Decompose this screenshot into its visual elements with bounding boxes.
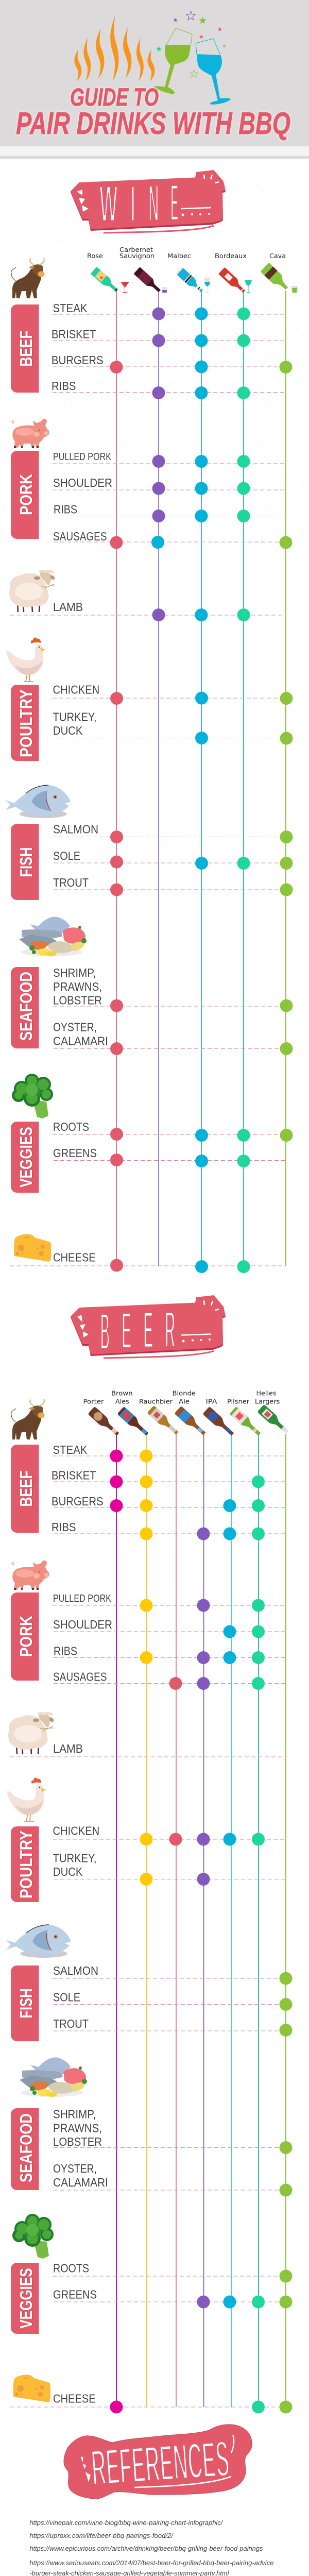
heading banner: beer: R xyxy=(165,1300,175,1360)
reference links xyxy=(29,2519,276,2576)
beer column headers: Blonde xyxy=(172,1390,196,1397)
panel tab: poultry (beer) xyxy=(11,1826,39,1902)
panel tab: pork (beer): PORK xyxy=(16,1616,36,1657)
reference links: https://vinepair.com/wine-blog/bbq-wine-pairing-chart-infographic/ xyxy=(29,2519,224,2527)
panel tab: seafood (beer): SEAFOOD xyxy=(16,2113,36,2182)
icon: brown ale bottle xyxy=(117,1406,151,1438)
row: brisket: BRISKET xyxy=(52,328,96,341)
wine column headers: Cava xyxy=(269,252,286,260)
row: roots xyxy=(53,1120,293,1142)
icon: rising flames xyxy=(74,15,154,81)
beer row: shoulder xyxy=(53,1618,286,1638)
beer row: pulled pork xyxy=(53,1593,286,1612)
icon: chicken xyxy=(6,637,45,682)
panel tab: fish (beer) xyxy=(11,1965,39,2041)
icon: sheep (beer) xyxy=(8,1714,55,1754)
beer row: shrimp, prawns, lobster: SHRIMP, xyxy=(53,2107,96,2121)
row: sole xyxy=(53,849,293,870)
row: lamb: LAMB xyxy=(53,600,83,614)
icon: chicken (beer) xyxy=(7,1777,46,1822)
icon: broccoli xyxy=(12,1074,53,1118)
icon: cheese xyxy=(14,1234,52,1262)
row: turkey, duck: DUCK xyxy=(53,724,83,737)
wine column headers: Rose xyxy=(87,252,103,260)
icon: fish xyxy=(5,785,71,818)
panel tab: poultry xyxy=(11,685,39,761)
icon: bull (beer) xyxy=(11,1399,44,1439)
heading banner: references xyxy=(64,2425,252,2499)
icon: helles lager bottle xyxy=(257,1404,291,1436)
row: salmon: SALMON xyxy=(53,822,98,836)
wine column headers xyxy=(87,246,286,260)
beer row: shrimp, prawns, lobster: LOBSTER xyxy=(53,2135,102,2148)
row: pork ribs xyxy=(54,503,286,522)
beer row: chicken: CHICKEN xyxy=(53,1824,99,1837)
heading banner: references: REFERENCES xyxy=(90,2430,231,2497)
icon: fish (beer) xyxy=(6,1925,71,1958)
icon: broccoli (beer) xyxy=(12,2214,54,2259)
row: chicken: CHICKEN xyxy=(53,683,99,697)
row: sausages: SAUSAGES xyxy=(53,530,107,543)
beer row: greens: GREENS xyxy=(53,2287,97,2301)
beer row: shoulder: SHOULDER xyxy=(53,1618,112,1631)
panel tab: pork xyxy=(11,451,39,539)
beer column headers: IPA xyxy=(206,1398,217,1405)
beer row: oyster, calamari: OYSTER, xyxy=(53,2162,97,2175)
beer row: turkey, duck: DUCK xyxy=(53,1865,83,1878)
wine column lines xyxy=(116,291,286,1266)
wine column headers: Carbernet xyxy=(119,246,153,253)
beer column headers: Ale xyxy=(179,1398,190,1405)
beer row: ribs: RIBS xyxy=(52,1520,76,1534)
icon: rauchbier bottle xyxy=(147,1405,181,1437)
panel tab: pork: PORK xyxy=(16,474,36,515)
beer row: trout xyxy=(53,2017,293,2037)
reference links: https://uproxx.com/life/beer-bbq-pairings-food/2/ xyxy=(29,2532,174,2539)
row: oyster, calamari: OYSTER, xyxy=(53,1020,97,1033)
beer row: greens xyxy=(53,2287,293,2308)
beer row: oyster, calamari xyxy=(53,2162,293,2197)
icon: rose bottle and glass xyxy=(91,267,129,294)
panel tab: veggies (beer): VEGGIES xyxy=(16,2268,36,2329)
row: turkey, duck xyxy=(53,710,293,745)
beer row: brisket xyxy=(52,1468,286,1488)
beer row: sole xyxy=(53,1991,293,2011)
beer row: sole: SOLE xyxy=(53,1991,80,2004)
row: ribs: RIBS xyxy=(52,379,76,393)
row: roots: ROOTS xyxy=(53,1120,89,1133)
beer row: cheese xyxy=(10,2392,293,2413)
beer row: sausages xyxy=(53,1670,286,1690)
row: oyster, calamari: CALAMARI xyxy=(53,1035,108,1048)
panel tab: veggies xyxy=(11,1122,39,1193)
heading banner: wine: N xyxy=(148,174,159,233)
row: cheese xyxy=(10,1251,286,1273)
panel tab: fish: FISH xyxy=(16,847,36,877)
beer column headers: Brown xyxy=(111,1390,133,1397)
row: shoulder xyxy=(53,476,286,495)
icon: pilsner bottle xyxy=(229,1406,263,1438)
row: shoulder: SHOULDER xyxy=(53,476,112,489)
panel tab: poultry (beer): POULTRY xyxy=(16,1831,36,1899)
beer row: turkey, duck: TURKEY, xyxy=(53,1852,97,1865)
row: chicken xyxy=(53,683,293,705)
row: oyster, calamari xyxy=(53,1020,293,1055)
icon: pig xyxy=(12,419,49,448)
panel tab: fish (beer): FISH xyxy=(16,1989,36,2019)
row: burgers xyxy=(52,353,293,374)
row: pulled pork xyxy=(53,451,286,468)
row: trout xyxy=(53,876,293,896)
row: sole: SOLE xyxy=(53,849,80,862)
speckled paper background xyxy=(0,159,309,555)
beer row: oyster, calamari: CALAMARI xyxy=(53,2176,108,2189)
row: cheese: CHEESE xyxy=(53,1251,96,1264)
row: steak: STEAK xyxy=(53,301,88,315)
icon: seafood platter (beer) xyxy=(20,2057,87,2097)
panel tab: fish xyxy=(11,824,39,900)
beer row: ribs xyxy=(52,1520,286,1540)
beer row: cheese: CHEESE xyxy=(53,2392,96,2405)
header strip xyxy=(0,146,309,159)
heading banner: beer xyxy=(71,1295,226,1362)
icon: pig (beer) xyxy=(12,1561,49,1590)
icon: blonde ale bottle xyxy=(174,1406,208,1437)
beer column lines xyxy=(116,1434,286,2407)
beer row: trout: TROUT xyxy=(53,2017,89,2030)
row: shrimp, prawns, lobster: PRAWNS, xyxy=(53,980,102,993)
panel tab: seafood: SEAFOOD xyxy=(16,972,36,1041)
panel tab: seafood xyxy=(11,967,39,1048)
icon: seafood platter xyxy=(19,917,87,956)
row: pulled pork: PULLED PORK xyxy=(53,451,112,463)
row: trout: TROUT xyxy=(53,876,89,889)
panel tab: seafood (beer) xyxy=(11,2108,39,2190)
heading banner: beer: E xyxy=(143,1300,153,1360)
row: sausages xyxy=(53,530,293,549)
row: ribs xyxy=(52,379,286,399)
heading banner: wine xyxy=(71,170,226,234)
row: salmon xyxy=(53,822,293,843)
beer row: roots: ROOTS xyxy=(53,2262,89,2275)
row: turkey, duck: TURKEY, xyxy=(53,710,97,723)
heading banner: beer: E xyxy=(122,1301,131,1361)
icon: malbec bottle and glass xyxy=(176,267,210,295)
beer row: steak: STEAK xyxy=(53,1443,88,1456)
icon: green wine glass xyxy=(153,28,192,94)
beer column headers xyxy=(83,1390,280,1405)
beer row: steak xyxy=(53,1443,286,1462)
beer row: burgers xyxy=(52,1495,286,1512)
beer row: burgers: BURGERS xyxy=(52,1495,104,1508)
beer row: salmon xyxy=(53,1964,293,1985)
icon: cava bottle and glass xyxy=(261,263,298,293)
row: lamb xyxy=(10,600,286,621)
panel tab: veggies: VEGGIES xyxy=(16,1127,36,1188)
icon: celebration stars xyxy=(156,11,226,77)
row: brisket xyxy=(52,328,286,347)
beer row: pulled pork: PULLED PORK xyxy=(53,1593,112,1604)
icon: bordeaux bottle and glass xyxy=(218,267,252,295)
beer row: pork ribs: RIBS xyxy=(54,1645,77,1658)
beer row: sausages: SAUSAGES xyxy=(53,1670,107,1684)
panel tab: beef (beer): BEEF xyxy=(16,1470,36,1506)
beer row: roots xyxy=(53,2262,293,2282)
icon: bull xyxy=(11,258,44,298)
row: steak xyxy=(53,301,286,320)
row: pork ribs: RIBS xyxy=(54,503,77,516)
icon: cheese (beer) xyxy=(13,2375,50,2402)
row: greens: GREENS xyxy=(53,1146,97,1160)
row: shrimp, prawns, lobster xyxy=(53,966,293,1012)
reference links: https://www.epicurious.com/archive/drinking/beer/bbq-grilling-beer-food-pairings xyxy=(29,2545,263,2552)
beer row: turkey, duck xyxy=(53,1852,286,1886)
beer row: shrimp, prawns, lobster: PRAWNS, xyxy=(53,2122,102,2135)
header background xyxy=(0,0,309,146)
beer row: brisket: BRISKET xyxy=(52,1468,96,1482)
panel tab: veggies (beer) xyxy=(11,2263,39,2334)
title xyxy=(16,84,290,141)
wine column headers: Bordeaux xyxy=(215,252,247,260)
row: burgers: BURGERS xyxy=(52,353,104,367)
title: GUIDE TO xyxy=(70,84,159,111)
panel tab: pork (beer) xyxy=(11,1592,39,1681)
panel tab: beef: BEEF xyxy=(16,331,36,367)
beer column headers: Rauchbier xyxy=(139,1398,173,1405)
panel tab: beef (beer) xyxy=(11,1445,39,1533)
heading banner: wine: I xyxy=(131,175,135,234)
icon: blue wine glass xyxy=(196,39,231,105)
beer column headers: Largers xyxy=(255,1398,280,1405)
beer column headers: Porter xyxy=(83,1398,104,1405)
beer row: shrimp, prawns, lobster xyxy=(53,2107,293,2154)
beer column headers: Helles xyxy=(256,1390,276,1397)
beer row: chicken xyxy=(53,1824,286,1845)
beer row: lamb: LAMB xyxy=(53,1742,83,1755)
icon: IPA bottle xyxy=(202,1406,236,1438)
beer row: salmon: SALMON xyxy=(53,1964,98,1977)
heading banner: wine: E xyxy=(170,173,178,232)
panel tab: poultry: POULTRY xyxy=(16,689,36,757)
icon: sheep xyxy=(9,571,56,612)
icon: cabernet bottle and glass xyxy=(133,267,167,295)
icon: porter bottle xyxy=(88,1406,122,1438)
row: shrimp, prawns, lobster: LOBSTER xyxy=(53,993,102,1007)
beer column headers: Ales xyxy=(115,1398,129,1405)
beer column headers: Pilsner xyxy=(227,1398,249,1405)
reference links: https://www.seriouseats.com/2014/07/best-beer-for-grilled-bbq-beer-pairing-advice xyxy=(29,2559,273,2567)
heading banner: wine: W xyxy=(99,174,117,234)
row: shrimp, prawns, lobster: SHRIMP, xyxy=(53,966,96,979)
wine column headers: Malbec xyxy=(167,252,191,260)
row: greens xyxy=(53,1146,286,1167)
heading banner: beer: B xyxy=(100,1302,110,1362)
panel tab: beef xyxy=(11,304,39,393)
wine column headers: Sauvignon xyxy=(119,252,154,260)
beer row: pork ribs xyxy=(54,1645,286,1664)
